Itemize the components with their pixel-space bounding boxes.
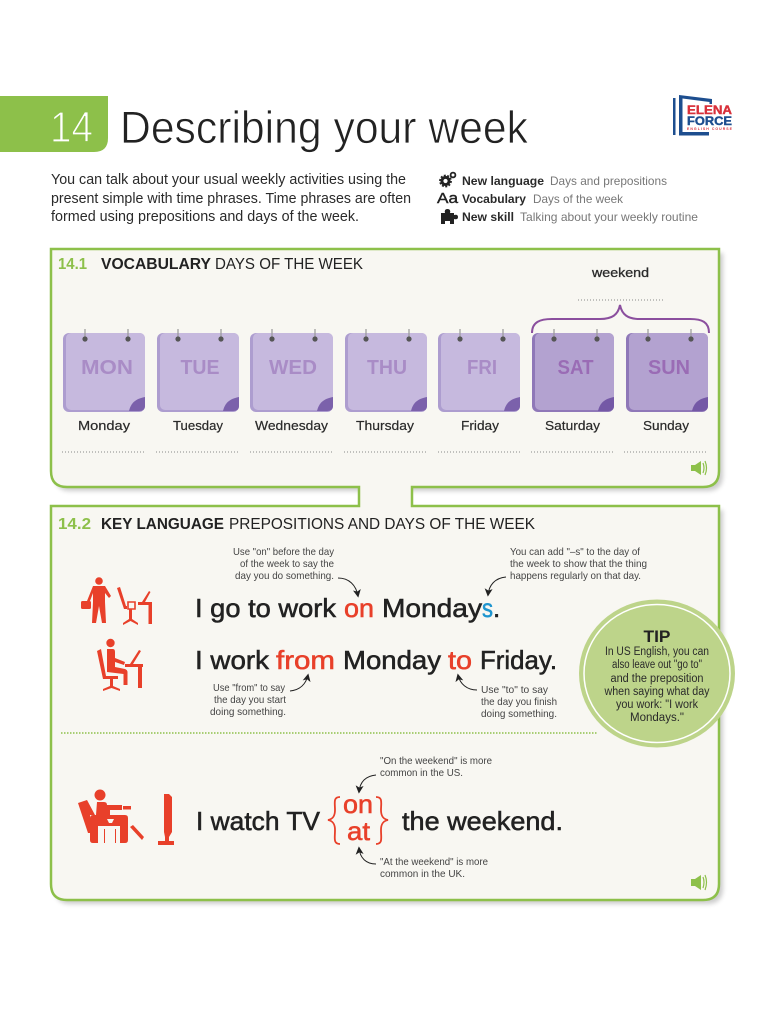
note: from: doing something. [210,706,286,718]
sentence 2: Friday. [480,645,557,675]
sentence 3 [196,789,563,846]
tip circle: In US English, you can [605,646,709,658]
arrow: on [338,578,358,596]
chapter number tab: 14 [50,103,93,152]
sentence 2: I work [195,645,270,675]
sentence 2: from [276,645,335,675]
logo: Elena Force: FORCE [687,116,732,128]
sentence 3: I watch TV [196,806,321,836]
intro text: formed using prepositions and days of the week. [51,209,359,225]
calendar: Monday: MON [81,357,133,379]
note: at the weekend: "At the weekend" is more [380,856,488,868]
vocabulary row: Days of the week [533,192,624,206]
chapter number tab [0,96,108,152]
new language row [462,174,667,188]
note: on [233,546,335,582]
vocabulary row: Vocabulary [462,192,526,206]
icon: Aa: Aa [437,190,459,207]
sentence 3: the weekend. [402,806,563,836]
note: on the weekend [380,755,492,779]
tip circle: Mondays." [630,712,684,724]
calendar: Tuesday: TUE [180,357,220,379]
calendar: Wednesday: WED [269,357,317,379]
note: to: doing something. [481,708,557,720]
arrow: from [290,675,308,691]
sentence 1: on [344,593,374,623]
heading 14.2 [58,516,536,533]
calendar: Thursday: THU [367,357,407,379]
icon: TV watcher [78,790,174,845]
weekend answer line [578,299,663,301]
icon: worker at desk [97,639,143,691]
tip circle: you work: "I work [616,699,698,711]
note: on the weekend: common in the US. [380,767,463,779]
calendar: Saturday: Saturday [545,418,601,433]
tip circle: when saying what day [604,686,710,698]
note: -s: the week to show that the thing [510,558,647,570]
note: -s: happens regularly on that day. [510,570,641,582]
note: -s [510,546,647,582]
sentence 3: at [347,816,371,846]
title: Describing your week [120,102,528,153]
calendar: Sunday: SUN [648,357,690,379]
icon: speaker 14.1 [691,461,706,475]
calendar: Friday: Friday [461,418,500,433]
note: on: day you do something. [235,570,334,582]
note: at the weekend [380,856,488,880]
logo: Elena Force [673,95,733,136]
logo: Elena Force: ELENA [687,105,732,117]
note: to: Use "to" to say [481,684,549,696]
sentence 1: Monday [382,593,482,623]
calendar: Friday [438,329,522,452]
heading 14.1 [58,256,364,273]
calendar: Thursday [344,329,428,452]
vocabulary row [462,192,624,206]
icon: gears [440,173,455,187]
calendar: Tuesday: Tuesday [173,418,223,433]
new skill row: Talking about your weekly routine [520,210,698,224]
icon: puzzle piece [441,209,458,224]
icon: commuter and empty desk [81,577,152,625]
heading 14.2: 14.2 [58,516,91,533]
arrow: at the weekend [359,848,376,864]
learning objectives [437,173,698,224]
arrow: on the weekend [359,775,376,792]
tip circle [579,600,735,748]
tip circle: also leave out "go to" [612,659,702,671]
heading 14.2: PREPOSITIONS AND DAYS OF THE WEEK [229,516,536,533]
calendar: Saturday: SAT [558,357,594,379]
calendar: Wednesday [250,329,334,452]
calendar: Friday: FRI [467,357,497,379]
intro text: You can talk about your usual weekly activities using the [51,172,406,188]
calendar: Sunday: Sunday [643,418,690,433]
note: from [210,682,286,718]
calendar: Thursday: Thursday [356,418,415,433]
sentence 1: I go to work [195,593,337,623]
calendar: Sunday [624,329,708,452]
note: to: the day you finish [481,696,557,708]
note: from: Use "from" to say [213,682,286,694]
weekend brace [532,305,709,333]
note: -s: You can add "–s" to the day of [510,546,640,558]
intro text: present simple with time phrases. Time phrases are often [51,191,411,207]
sentence 2: Monday [343,645,441,675]
note: on the weekend: "On the weekend" is more [380,755,492,767]
arrow: to [458,675,477,690]
new language row: Days and prepositions [550,174,667,188]
sentence 1: . [493,593,500,623]
new language row: New language [462,174,544,188]
note: to [481,684,557,720]
calendar: Monday [62,329,146,452]
calendar: Monday: Monday [78,418,131,433]
calendar: Tuesday [156,329,240,452]
icon: speaker 14.2 [691,875,706,890]
sentence 3: on [343,789,373,819]
sentence 2: to [448,645,472,675]
note: from: the day you start [214,694,286,706]
weekend label: weekend [591,265,649,280]
logo: Elena Force: ENGLISH COURSE [687,127,733,131]
sentence 2 [195,645,557,675]
arrow: -s [488,577,506,595]
tip circle: TIP [644,627,670,646]
new skill row: New skill [462,210,514,224]
tip circle: and the preposition [610,673,704,685]
heading 14.2: KEY LANGUAGE [101,516,224,533]
note: on: Use "on" before the day [233,546,335,558]
calendar: Wednesday: Wednesday [255,418,329,433]
sentence 1: s [482,593,493,623]
calendar: Saturday [531,329,615,452]
heading 14.1: VOCABULARY [101,256,212,273]
intro text [51,172,411,225]
note: at the weekend: common in the UK. [380,868,465,880]
sentence 1 [195,593,500,623]
panels [51,249,723,904]
note: on: of the week to say the [240,558,334,570]
heading 14.1: 14.1 [58,256,87,273]
heading 14.1: DAYS OF THE WEEK [215,256,364,273]
